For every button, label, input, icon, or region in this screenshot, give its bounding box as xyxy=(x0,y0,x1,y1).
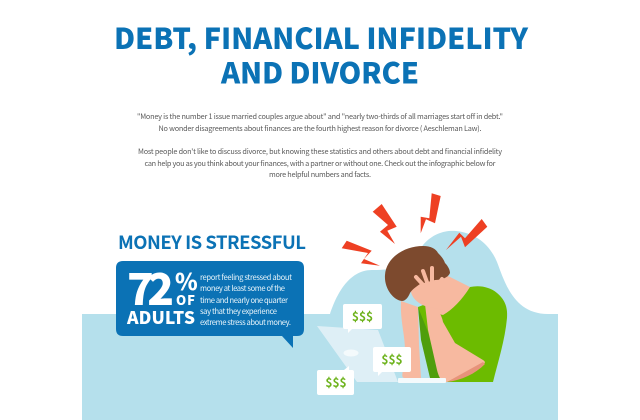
title: AND DIVORCE xyxy=(220,50,419,92)
title: DEBT, FINANCIAL INFIDELITY xyxy=(114,16,528,58)
neck xyxy=(428,278,470,315)
money bubble 2 xyxy=(373,347,411,376)
green shirt xyxy=(418,286,507,382)
statistic: % xyxy=(175,263,198,297)
intro text: "Money is the number 1 issue married couples argue about" and "nearly two-thirds of all marriages start off in debt." xyxy=(137,112,503,122)
money bubble 2: $$$ xyxy=(381,351,403,368)
hair xyxy=(385,246,450,301)
money bubble 3: $$$ xyxy=(325,374,347,391)
callout text: time and nearly one quarter xyxy=(200,295,288,306)
illustration: stressed person at laptop xyxy=(317,193,507,395)
fingers xyxy=(416,268,442,288)
face and hand xyxy=(411,274,452,310)
title xyxy=(114,16,528,92)
left arm xyxy=(401,301,421,378)
statistic: ADULTS xyxy=(126,305,195,330)
callout text: extreme stress about money. xyxy=(200,317,291,328)
intro text: more helpful numbers and facts. xyxy=(269,170,371,180)
light blue background band xyxy=(82,231,558,420)
laptop screen xyxy=(317,326,398,382)
statistic xyxy=(126,254,198,330)
callout text: say that they experience xyxy=(200,306,277,317)
laptop base xyxy=(398,378,446,383)
arm shadow xyxy=(447,362,485,382)
money bubble 1 xyxy=(343,304,382,333)
callout text: money at least some of the xyxy=(200,283,285,294)
right arm xyxy=(425,304,485,382)
statistic: OF xyxy=(176,290,195,309)
intro text: No wonder disagreements about finances are the fourth highest reason for divorce ( Aeschleman Law). xyxy=(158,124,482,134)
money bubble 3 xyxy=(317,366,354,395)
heading: money is stressful: MONEY IS STRESSFUL xyxy=(118,229,306,255)
intro text xyxy=(137,112,503,180)
statistic: 72 xyxy=(127,254,174,318)
callout text xyxy=(200,272,292,328)
intro text: can help you as you think about your finances, with a partner or without one. Check out the infographic below for xyxy=(144,159,496,169)
callout text: report feeling stressed about xyxy=(200,272,292,283)
intro text: Most people don't like to discuss divorce, but knowing these statistics and others about debt and financial infidelity xyxy=(138,147,502,157)
callout: 72 percent of adults xyxy=(116,254,304,348)
shirt shadow xyxy=(418,307,440,378)
money bubble 1: $$$ xyxy=(352,308,373,325)
icon: red stress bolts xyxy=(342,193,487,266)
callout bubble xyxy=(116,261,304,348)
